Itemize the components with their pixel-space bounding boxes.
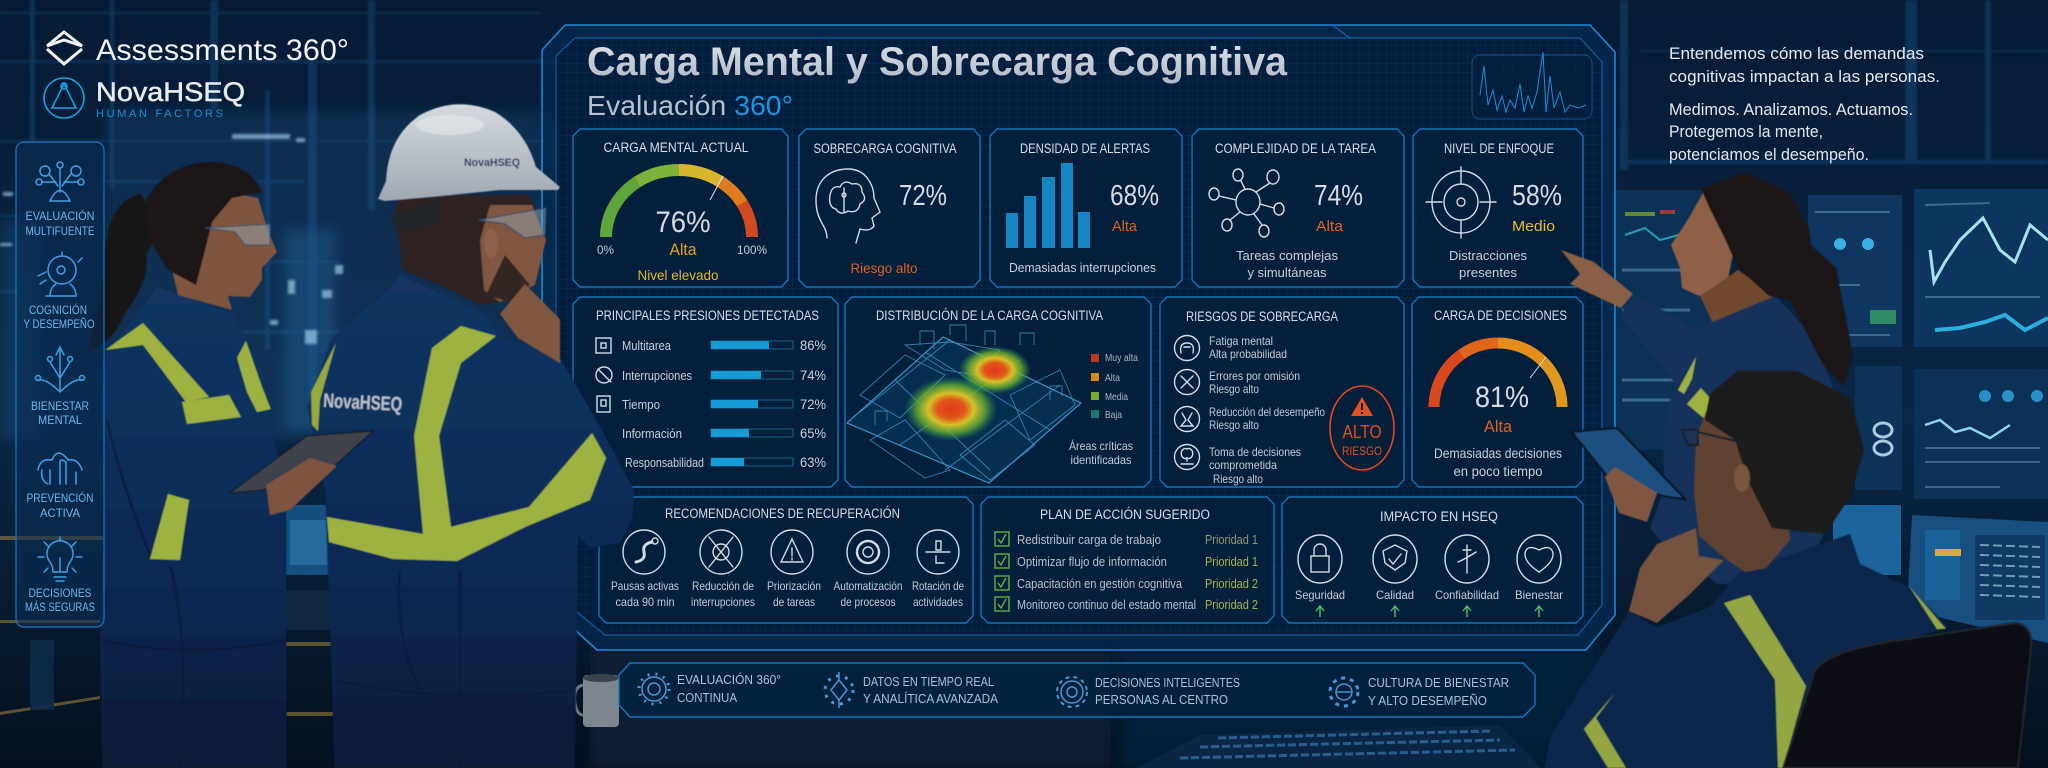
company tagline: HUMAN FACTORS [96, 108, 223, 120]
card: complejidad de la tarea [1192, 129, 1404, 287]
ponytail and hair [86, 194, 160, 353]
legend [1091, 352, 1138, 421]
note: Distracciones [1449, 248, 1527, 263]
hair top [146, 162, 262, 285]
arm and hand [1561, 250, 1633, 308]
recommendation labels: Pausas activas [611, 579, 679, 593]
caption: identificadas [1070, 453, 1132, 467]
company name: NovaHSEQ [96, 77, 245, 107]
person: woman pointing, right [1561, 172, 1853, 584]
item: evaluación continua: CONTINUA [677, 690, 737, 705]
person: man with helmet [307, 104, 634, 768]
risk: fatiga mental: Alta probabilidad [1209, 347, 1287, 361]
card title: NIVEL DE ENFOQUE [1444, 141, 1554, 156]
recommendation labels: de procesos [840, 595, 896, 609]
row: información [622, 425, 826, 441]
note: Nivel elevado [638, 267, 719, 283]
neck [1700, 270, 1775, 322]
scale min: 0% [597, 243, 614, 257]
note: Demasiadas decisiones [1434, 445, 1562, 461]
row: responsabilidad: 63% [800, 454, 826, 470]
card title: CARGA DE DECISIONES [1434, 308, 1567, 323]
item: evaluación multifuente [26, 162, 95, 238]
legend: Muy alta [1105, 352, 1138, 364]
item: datos en tiempo real [825, 672, 998, 708]
title: Carga Mental y Sobrecarga Cognitiva [587, 40, 1288, 84]
recommendation labels: de tareas [773, 595, 815, 609]
item: cognición y desempeño: COGNICIÓN [29, 304, 87, 317]
item: decisiones inteligentes: DECISIONES INTELIGENTES [1095, 675, 1240, 690]
monitor wall [1614, 189, 2048, 643]
hand at chin [1629, 528, 1724, 623]
tablet [1572, 428, 1685, 499]
item: cognición y desempeño [24, 252, 95, 331]
value: 58% [1512, 180, 1562, 212]
risk: fatiga mental [1174, 334, 1287, 361]
jacket back text: NovaHSEQ [323, 390, 403, 416]
item: datos en tiempo real: DATOS EN TIEMPO REAL [863, 674, 994, 689]
item: prevención activa [26, 453, 94, 520]
face [1694, 402, 1790, 572]
item: prevención activa: ACTIVA [40, 508, 80, 520]
impact icons [1298, 535, 1561, 583]
coffee mug [575, 674, 619, 727]
hand with tablet [1605, 467, 1657, 522]
card title: PLAN DE ACCIÓN SUGERIDO [1040, 507, 1210, 522]
caption [1069, 438, 1133, 467]
item: bienestar mental: BIENESTAR [31, 401, 89, 413]
legend: Media [1105, 391, 1128, 403]
jacket folds [100, 420, 287, 768]
row: interrupciones: 74% [800, 367, 826, 383]
jacket [100, 287, 287, 768]
jacket [307, 275, 634, 768]
card: carga de decisiones [1412, 297, 1583, 487]
keyboard on desk [1136, 725, 1541, 768]
row: interrupciones [622, 367, 826, 383]
hair [1701, 172, 1853, 386]
note: Tareas complejas [1236, 248, 1339, 263]
impact arrows [1316, 606, 1543, 617]
recommendation labels: Rotación de [912, 579, 964, 593]
recommendation labels: Automatización [834, 579, 902, 593]
jacket folds and hem [333, 570, 575, 768]
card: plan de acción sugerido [981, 497, 1274, 623]
item: evaluación multifuente: MULTIFUENTE [26, 226, 95, 238]
card: sobrecarga cognitiva [799, 129, 980, 287]
sidebar [16, 142, 104, 627]
impact labels: Calidad [1376, 588, 1414, 602]
hi-vis stripes [105, 323, 271, 560]
item: bienestar mental: MENTAL [38, 415, 83, 427]
jacket [1619, 294, 1840, 584]
checklist: Monitoreo continuo del estado mental [1017, 598, 1196, 612]
badge: alto riesgo [1330, 386, 1394, 470]
row: tiempo [622, 396, 826, 412]
bar chart [1006, 163, 1090, 248]
value: 74% [1314, 180, 1363, 212]
risk: toma de decisiones: Riesgo alto [1213, 472, 1263, 486]
hand at chin [500, 284, 560, 363]
status: Alta [1316, 218, 1344, 235]
person: seated man, right [1544, 371, 2031, 768]
item: evaluación continua [639, 672, 781, 705]
face [1671, 193, 1738, 296]
intro text, top right: Entendemos cómo las demandas [1669, 45, 1924, 63]
recommendation labels: actividades [913, 595, 963, 609]
checklist: Prioridad 2 [1205, 598, 1258, 612]
impact labels: Bienestar [1515, 588, 1563, 602]
risk: toma de decisiones: Toma de decisiones [1209, 445, 1301, 459]
risk: reducción del desempeño: Riesgo alto [1209, 418, 1259, 432]
checklist: Prioridad 2 [1205, 577, 1258, 591]
note: y simultáneas [1248, 265, 1327, 280]
card title: RIESGOS DE SOBRECARGA [1186, 309, 1338, 324]
icon: novahseq logo [44, 78, 84, 118]
icons: pressure [596, 338, 612, 412]
hi-vis shoulder [311, 343, 336, 431]
intro text, top right: Medimos. Analizamos. Actuamos. [1669, 101, 1913, 119]
status: Alta [1112, 218, 1138, 235]
head [395, 195, 546, 305]
checklist [995, 532, 1258, 612]
row: multitarea: Multitarea [622, 338, 672, 353]
main holographic panel [542, 25, 1615, 650]
card title: IMPACTO EN HSEQ [1380, 509, 1498, 524]
row: responsabilidad: Responsabilidad [625, 455, 704, 470]
item: bienestar mental [31, 347, 89, 427]
checklist: Capacitación en gestión cognitiva [1017, 577, 1182, 591]
risk: toma de decisiones [1174, 444, 1301, 486]
impact labels: Seguridad [1295, 588, 1345, 602]
risk: errores por omisión: Riesgo alto [1209, 382, 1259, 396]
checklist: Prioridad 1 [1205, 555, 1258, 569]
card title: RECOMENDACIONES DE RECUPERACIÓN [665, 506, 900, 521]
card title: COMPLEJIDAD DE LA TAREA [1215, 141, 1376, 156]
item: cultura de bienestar [1330, 675, 1509, 708]
status: Riesgo alto [850, 260, 918, 276]
intro text, top right [1669, 45, 1940, 164]
hi-vis vertical [414, 326, 496, 534]
card title: DENSIDAD DE ALERTAS [1020, 141, 1150, 156]
row: información: 65% [800, 425, 826, 441]
value: 81% [1475, 381, 1529, 414]
row: tiempo: Tiempo [622, 397, 660, 412]
risk: errores por omisión: Errores por omisión [1209, 369, 1300, 383]
item: cultura de bienestar: CULTURA DE BIENESTAR [1368, 675, 1509, 690]
scale max: 100% [737, 243, 767, 257]
safety glasses [205, 224, 270, 245]
status: Alta [670, 240, 697, 259]
recommendation labels: cada 90 min [616, 595, 674, 609]
card: nivel de enfoque [1413, 129, 1583, 287]
row: responsabilidad [625, 454, 826, 470]
hand [266, 458, 337, 515]
item: decisiones más seguras: MÁS SEGURAS [25, 601, 95, 614]
icon: network [1209, 169, 1284, 237]
item: decisiones más seguras [25, 537, 95, 614]
item: evaluación continua: EVALUACIÓN 360° [677, 672, 781, 687]
card title: SOBRECARGA COGNITIVA [814, 141, 956, 156]
gauge [606, 170, 752, 237]
hi-vis [1584, 586, 1946, 768]
recommendation icons [623, 530, 959, 574]
item: evaluación multifuente: EVALUACIÓN [26, 210, 94, 223]
recommendation labels: Priorización [767, 579, 821, 593]
note: en poco tiempo [1454, 463, 1543, 479]
office chair [1783, 623, 2031, 768]
heatmap: isometric plant [847, 325, 1081, 483]
item: cognición y desempeño: Y DESEMPEÑO [24, 318, 95, 331]
risk: toma de decisiones: comprometida [1209, 458, 1277, 472]
note: Demasiadas interrupciones [1009, 260, 1156, 275]
card title: DISTRIBUCIÓN DE LA CARGA COGNITIVA [876, 308, 1103, 323]
hi-vis horizontal [327, 433, 606, 561]
icon: head with brain [816, 169, 880, 243]
card title: PRINCIPALES PRESIONES DETECTADAS [596, 308, 819, 323]
gauge [1434, 343, 1562, 407]
helmet text: NovaHSEQ [464, 157, 520, 169]
risk: reducción del desempeño [1174, 405, 1325, 432]
impact labels [1295, 588, 1563, 602]
legend: Alta [1105, 372, 1120, 384]
icon: target [1426, 167, 1496, 238]
tablet [230, 431, 373, 493]
note [1236, 248, 1339, 280]
value: 68% [1110, 180, 1159, 212]
item: prevención activa: PREVENCIÓN [26, 492, 94, 505]
impact labels: Confiabilidad [1435, 588, 1499, 602]
neck and face [165, 190, 277, 310]
checklist: Optimizar flujo de información [1017, 555, 1167, 569]
row: tiempo: 72% [800, 396, 826, 412]
row: multitarea: 86% [800, 337, 826, 353]
sparkline widget [1472, 52, 1592, 119]
recommendation labels: interrupciones [691, 595, 755, 609]
card: impacto en hseq [1282, 497, 1583, 623]
badge: alto riesgo: RIESGO [1342, 444, 1382, 458]
safety glasses [478, 208, 546, 238]
card: densidad de alertas [990, 129, 1182, 287]
caption: Áreas críticas [1069, 438, 1133, 453]
row: multitarea [622, 337, 826, 353]
checklist: Redistribuir carga de trabajo [1017, 533, 1161, 547]
item: datos en tiempo real: Y ANALÍTICA AVANZADA [863, 691, 998, 706]
brand name: Assessments 360° [96, 34, 349, 67]
card: distribución de la carga cognitiva [845, 297, 1151, 487]
row: información: Información [622, 426, 682, 441]
value: 76% [656, 206, 710, 239]
person: woman with tablet, left [86, 162, 373, 768]
brand block [44, 32, 349, 120]
hair [1705, 371, 1864, 534]
card: carga mental actual [573, 129, 788, 287]
hi-vis [1678, 357, 1717, 420]
card title: CARGA MENTAL ACTUAL [604, 140, 749, 155]
recommendation labels [611, 579, 964, 609]
note [1449, 248, 1527, 280]
intro text, top right: cognitivas impactan a las personas. [1669, 68, 1940, 86]
status: Alta [1484, 417, 1513, 436]
item: cultura de bienestar: Y ALTO DESEMPEÑO [1368, 693, 1487, 708]
jacket [1544, 534, 1948, 768]
card: recomendaciones de recuperación [599, 497, 973, 623]
status: Medio [1512, 218, 1555, 235]
risk: errores por omisión [1174, 369, 1300, 396]
icon: assessments logo [47, 32, 82, 64]
intro text, top right: potenciamos el desempeño. [1669, 146, 1869, 164]
checklist: Prioridad 1 [1205, 533, 1258, 547]
risk: reducción del desempeño: Reducción del desempeño [1209, 405, 1325, 419]
badge: alto riesgo: ALTO [1342, 422, 1382, 442]
row: interrupciones: Interrupciones [622, 368, 692, 383]
item: decisiones más seguras: DECISIONES [28, 588, 92, 600]
item: decisiones inteligentes: PERSONAS AL CENTRO [1095, 692, 1228, 707]
glasses [1682, 430, 1740, 445]
legend: Baja [1105, 409, 1122, 421]
bottom strip [619, 663, 1535, 717]
value: 72% [899, 180, 947, 212]
item: decisiones inteligentes [1057, 675, 1240, 707]
ear [1734, 464, 1750, 492]
helmet [378, 104, 560, 201]
card: riesgos de sobrecarga [1160, 297, 1404, 487]
card: principales presiones detectadas [573, 297, 838, 487]
recommendation labels: Reducción de [692, 579, 754, 593]
intro text, top right: Protegemos la mente, [1669, 123, 1823, 141]
risk: fatiga mental: Fatiga mental [1209, 334, 1273, 348]
subtitle: Evaluación 360° [587, 90, 793, 121]
note [1434, 445, 1562, 479]
note: presentes [1459, 265, 1518, 280]
